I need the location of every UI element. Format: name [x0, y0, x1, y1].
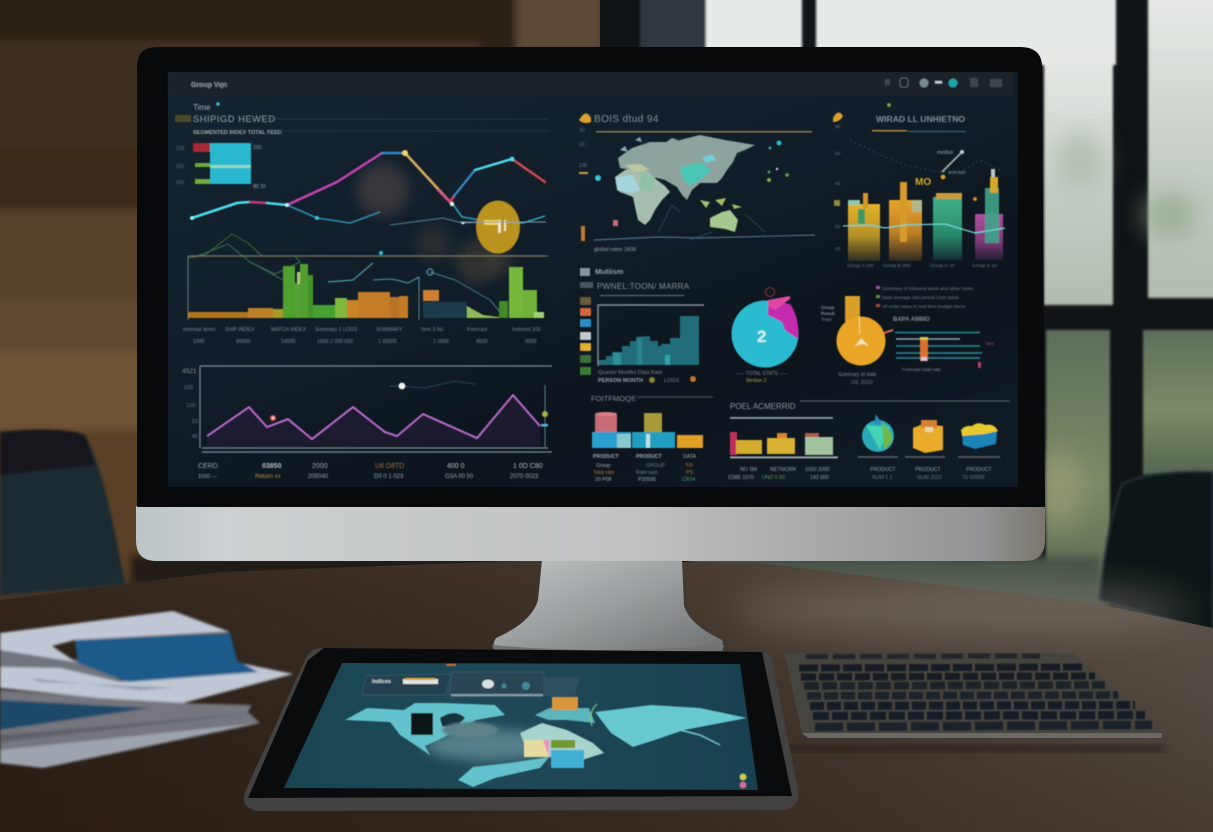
x-axis labels: Forecast: [467, 327, 488, 333]
map axis: 100: [579, 163, 588, 169]
tablet: [244, 648, 798, 811]
legend rows: BAPA AMMO: [893, 317, 930, 323]
x-axis labels: 14000: [281, 339, 296, 345]
heading: [579, 113, 812, 132]
legend swatches: [580, 297, 591, 375]
block captions: PS: [686, 470, 693, 476]
pie chart: ----- TOTAL STATS -----: [736, 371, 788, 377]
gauge: Total: [821, 317, 831, 323]
top bar: Group Vqn: [191, 82, 227, 89]
chart captions: [598, 370, 696, 384]
horizontal lines: [895, 332, 994, 373]
faint trend and markers: [270, 381, 548, 448]
labels below chart: CERD: [198, 463, 218, 470]
x-axis labels: revenue items: [183, 327, 216, 333]
x-axis labels: 1 82000: [378, 339, 397, 345]
labels below chart: 03850: [262, 463, 282, 470]
teal bar chart: [598, 305, 704, 366]
lower pages: [0, 690, 260, 768]
axis labels: Group D 10: [972, 263, 997, 269]
labels below chart: Return xx: [255, 474, 281, 480]
purple area: [207, 395, 540, 446]
secondary lines: [188, 203, 545, 312]
x-axis labels: SHIP INDEX: [225, 327, 255, 333]
x-axis labels: SUMMARY: [376, 327, 403, 333]
captions: PRODUCT: [966, 467, 992, 473]
heading: [833, 103, 966, 132]
horizontal lines: text: [986, 341, 994, 347]
captions: NUM 1 1: [872, 475, 893, 481]
labels below chart: [198, 463, 543, 480]
axis labels: 20: [835, 224, 841, 230]
gauge chart with horizontal bars: [821, 286, 994, 386]
labels below chart: D0 0 1 023: [374, 474, 404, 480]
block captions: CR24: [682, 477, 695, 483]
mini legend box: 300: [176, 180, 185, 186]
caption rules: [858, 456, 1000, 458]
y-axis labels: 40: [192, 434, 198, 440]
icon: teal sphere: [862, 414, 894, 452]
y-axis labels: 100: [186, 403, 195, 409]
scatter trail: median: [937, 150, 954, 156]
labels below chart: 2000: [312, 463, 328, 470]
captions: NO SM: [740, 467, 757, 473]
axis labels: 10: [835, 246, 841, 252]
gauge: GE 2020: [851, 380, 873, 386]
heading: Mutiism: [595, 267, 624, 276]
labels below chart: 2070 0023: [510, 474, 539, 480]
monitor: [136, 47, 1045, 561]
toolbar icons: [885, 78, 1002, 88]
upper sheet: [0, 663, 293, 703]
captions: T0 S0000: [962, 475, 985, 481]
blocks: [592, 412, 703, 448]
horizontal lines: Forecast total rate: [902, 367, 941, 373]
mini legend box: 200: [176, 164, 185, 170]
scatter trail: [850, 140, 1000, 188]
chair right: [1099, 472, 1213, 632]
legend rows: [876, 286, 974, 323]
map axis: global rates 1800: [594, 247, 636, 253]
captions: NETWORK: [770, 467, 797, 473]
captions: PRODUCT: [915, 467, 941, 473]
icon: yellow box: [913, 420, 943, 453]
panel: purple line chart: [182, 366, 552, 480]
monitor chin: [136, 506, 1045, 561]
heading: SEGMENTED INDEX TOTAL FEED: [193, 130, 282, 136]
x-axis labels: Summary 1 LOGS: [315, 327, 358, 333]
axis labels: 50: [835, 151, 841, 157]
captions: NUM 2022: [917, 475, 942, 481]
block captions: P20500: [638, 477, 656, 483]
pie chart: Median 2: [746, 378, 767, 384]
x-axis labels: Indexed 100: [512, 327, 541, 333]
x-axis labels: 4000: [476, 339, 488, 345]
blurred glare spots: [357, 164, 514, 284]
panel: line chart and bars: [175, 102, 550, 345]
axis labels: Group B 200: [883, 263, 911, 269]
block captions: [593, 454, 697, 483]
labels below chart: 1 0D C80: [513, 463, 543, 470]
bar chart: [188, 264, 544, 318]
heading: FOITFMOQE: [591, 394, 636, 403]
axis labels: Group C 10: [930, 263, 955, 269]
pie chart: [732, 288, 798, 384]
chart captions: Quarter Months Data Rate: [598, 370, 663, 376]
panel: world map: [579, 113, 815, 253]
captions: 1000 2000: [805, 467, 830, 473]
block captions: Group: [596, 463, 611, 469]
block captions: PRODUCT: [636, 454, 662, 460]
captions: C08E 1070: [728, 475, 754, 481]
scatter trail: MO: [915, 177, 931, 188]
map markers: [595, 141, 789, 240]
x-axis labels: 1 0000: [433, 339, 449, 345]
labels below chart: U8 D8TD: [375, 463, 404, 470]
panel: achievements: [728, 401, 1010, 481]
gauge: Result: [821, 311, 835, 317]
block captions: FR: [686, 463, 693, 469]
chart frame: [200, 366, 552, 452]
block captions: 20 P08: [595, 477, 612, 483]
map axis: 10: [579, 142, 585, 148]
captions: PRODUCT: [870, 467, 896, 473]
axis labels: [834, 124, 997, 269]
y-axis labels: 100: [184, 385, 193, 391]
axis labels: Group A 100: [847, 263, 874, 269]
block captions: PRODUCT: [593, 454, 619, 460]
table top: [0, 560, 1213, 832]
background: brick wall: [0, 0, 620, 600]
y-axis labels: [182, 368, 198, 440]
y-axis labels: 4521: [182, 368, 197, 375]
blue tab: [75, 633, 258, 682]
bars: [848, 169, 1003, 261]
legend rows: Data average last period Cost Value: [882, 295, 959, 301]
paper stack: [0, 611, 293, 768]
gauge: Summary of data: [838, 372, 876, 378]
background: window with frames: [600, 0, 1213, 606]
heading: BOIS dtud 94: [594, 114, 659, 125]
x-axis labels: 1600 2 000 000: [317, 339, 353, 345]
mini legend box: [176, 143, 266, 190]
axis labels: 30: [835, 201, 841, 207]
labels below chart: 1000 ---: [198, 474, 217, 480]
foliage smudges: [1038, 130, 1196, 530]
gauge: Group: [821, 305, 835, 311]
tablet screen: [284, 663, 758, 790]
tablet map: [345, 697, 747, 787]
axis labels: 40: [835, 181, 841, 187]
monitor screen: [168, 72, 1018, 487]
x-axis labels: Item 3 list: [421, 327, 444, 333]
yellow circle: [460, 200, 546, 254]
map continents: [615, 135, 755, 232]
chair left: [0, 430, 125, 595]
bars: [730, 432, 838, 458]
captions: UND 5 00: [762, 475, 785, 481]
block captions: GROUP: [646, 463, 666, 469]
heading: [580, 267, 690, 296]
axis rule: [188, 255, 548, 257]
axis labels: 90: [835, 124, 841, 130]
monitor stand: [492, 560, 724, 651]
captions: [728, 467, 992, 481]
tablet UI panels: [362, 672, 580, 696]
labels below chart: 400 0: [447, 463, 465, 470]
main multi-colour line: [192, 153, 545, 218]
x-axis labels: 60000: [236, 339, 251, 345]
heading: [175, 102, 282, 136]
labels below chart: 205040: [308, 474, 329, 480]
map axis: [579, 128, 815, 253]
keyboard: [770, 653, 1165, 752]
top sheet: [0, 611, 230, 662]
x-axis labels: [183, 327, 541, 345]
mini legend box: 200: [253, 145, 262, 151]
captions: 142 000: [810, 475, 829, 481]
top bar: [168, 72, 1014, 96]
icon: blue tray of gold: [961, 423, 998, 449]
heading: PWNEL:TOON/ MARRA: [597, 282, 690, 291]
tablet corner dots: [446, 664, 746, 788]
x-axis labels: MATCH INDEX: [271, 327, 307, 333]
panel: funnel area chart: [580, 267, 704, 384]
mini legend box: 90 10: [253, 184, 266, 190]
chart captions: LOGS: [664, 378, 680, 384]
gauge: [821, 296, 893, 386]
block captions: Total rate: [593, 470, 614, 476]
block captions: DATA: [683, 454, 697, 460]
chart captions: PERSON MONTH: [598, 378, 643, 384]
shadowed under-sheet: [0, 648, 130, 684]
heading: Time: [193, 103, 211, 112]
purple line: [207, 395, 540, 439]
legend rows: Summary of inbound stock and other totals: [882, 286, 974, 292]
pie chart: 2: [757, 327, 766, 346]
heading: SHIPIGD HEWED: [193, 113, 276, 124]
panel: growth bars: [833, 103, 1005, 269]
y-axis labels: 50: [192, 419, 198, 425]
scatter trail: average: [948, 170, 966, 176]
trend line over bars: [843, 224, 1005, 233]
legend rows: All order rates in real time budget items: [882, 304, 966, 310]
tablet body: [244, 648, 798, 811]
labels below chart: G3A 00 50: [445, 474, 474, 480]
monitor bezel: [137, 47, 1045, 507]
map axis: 20: [579, 128, 585, 134]
block captions: Rate sum: [636, 470, 658, 476]
line chart markers: [190, 150, 514, 275]
x-axis labels: 1000: [193, 339, 205, 345]
x-axis labels: 0000: [525, 339, 537, 345]
panel: stacked blocks: [591, 394, 713, 483]
heading: POEL ACMERRID: [730, 402, 796, 411]
heading: WIRAD LL UNHIETNO: [876, 114, 965, 124]
tablet UI panels: Indices: [372, 679, 391, 685]
mini legend box: 100: [176, 146, 185, 152]
